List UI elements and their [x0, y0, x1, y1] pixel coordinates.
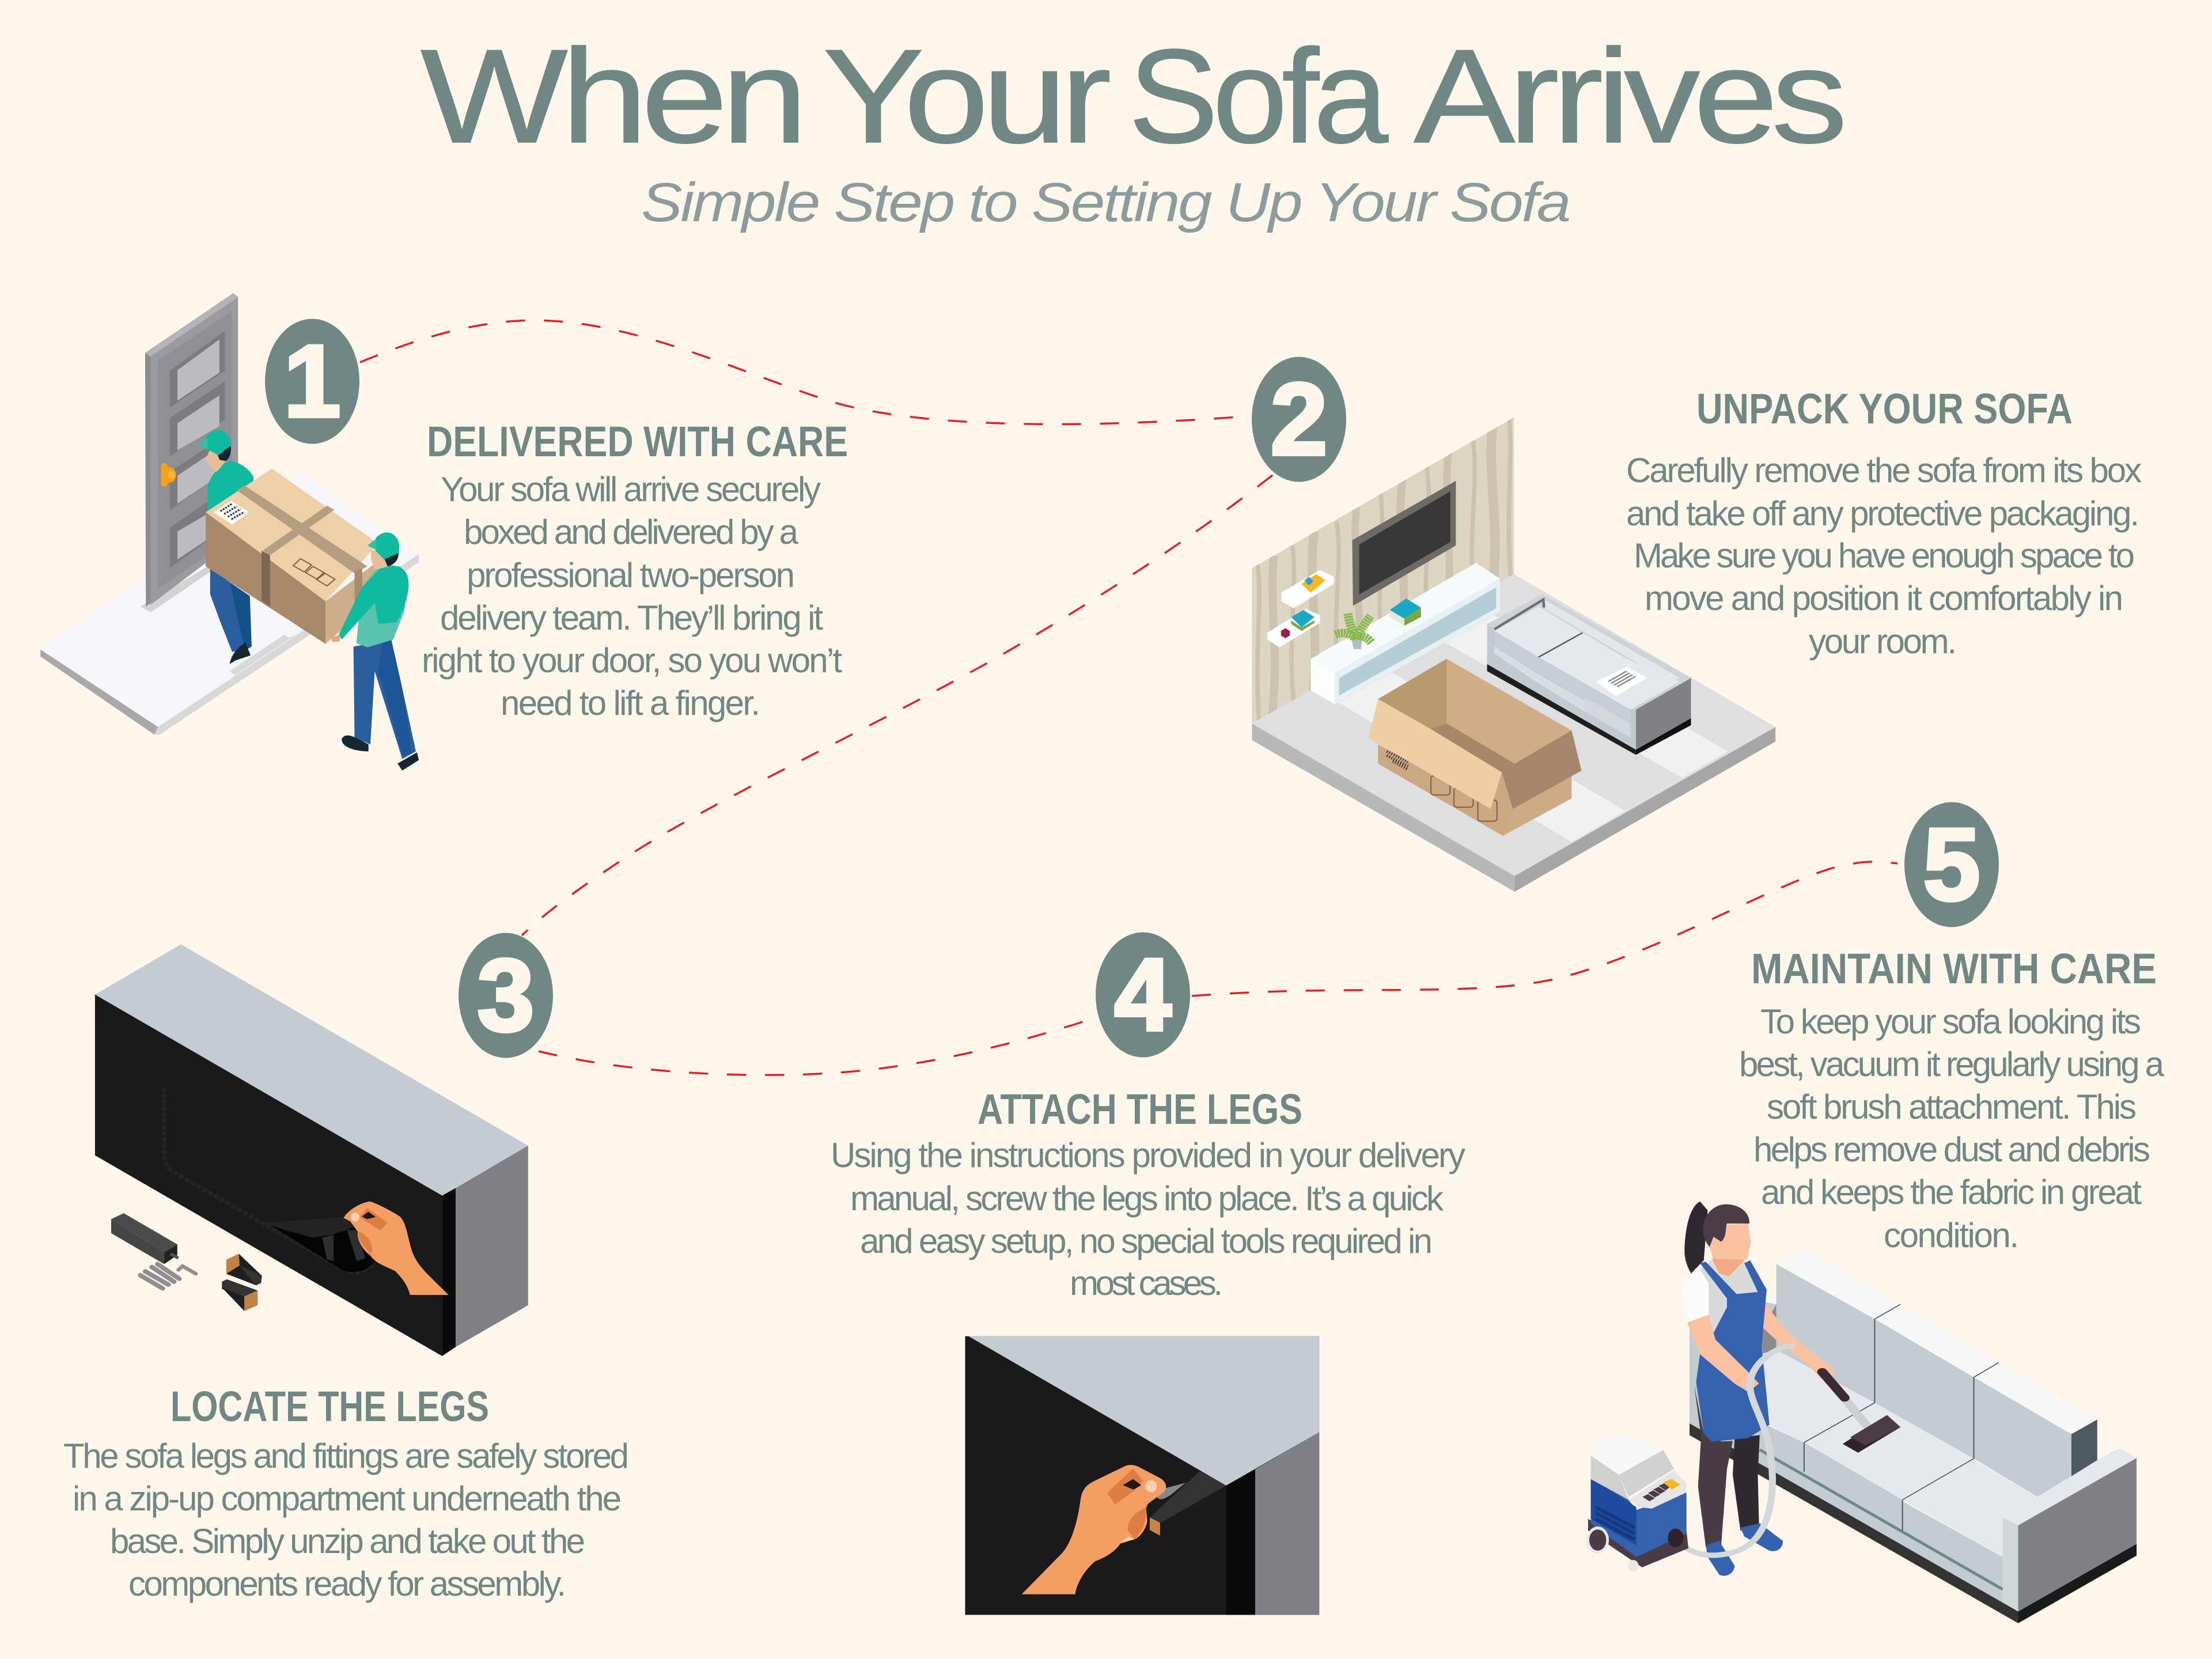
- box handling icons: [293, 559, 335, 586]
- step 1 body text: professional two-person: [467, 556, 795, 594]
- doorstep slab: [40, 472, 419, 734]
- dashed path: step 1 to step 2: [360, 320, 1253, 424]
- front delivery man: [331, 532, 419, 771]
- step 4 badge: 4: [1114, 937, 1172, 1052]
- step 2 badge: 2: [1271, 362, 1327, 476]
- sofa arm: [2003, 1448, 2137, 1525]
- step 1 badge: [265, 319, 359, 444]
- step 5 heading: MAINTAIN WITH CARE: [1751, 945, 2157, 993]
- tapered leg 1: [226, 1254, 262, 1285]
- apron: [1696, 1260, 1770, 1442]
- books on tv unit: [1390, 599, 1421, 619]
- sofa underside: [95, 995, 442, 1356]
- illustration: room with unpacked sofa: [1252, 416, 1775, 892]
- step 4 body text: manual, screw the legs into place. It’s a quick: [850, 1179, 1444, 1218]
- hand: [1022, 1465, 1166, 1594]
- dashed path: step 3 to step 4: [539, 1018, 1093, 1075]
- screws and allen key: [141, 1264, 196, 1289]
- step 5 body text: [1739, 1002, 2165, 1255]
- step 3 heading: LOCATE THE LEGS: [171, 1382, 489, 1430]
- cardboard box: [206, 469, 380, 644]
- shoes: [1706, 1541, 1734, 1576]
- legs inside compartment: [322, 1230, 365, 1261]
- step 4 heading: ATTACH THE LEGS: [978, 1085, 1302, 1133]
- side face: [1255, 1432, 1319, 1615]
- sofa top face: [95, 944, 528, 1196]
- sofa side face: [456, 1146, 528, 1347]
- shirt: [1700, 1260, 1766, 1336]
- step 4 body text: Using the instructions provided in your delivery: [831, 1136, 1465, 1175]
- step 1 body text: [422, 470, 842, 722]
- illustration: woman vacuuming sofa: [1586, 1202, 2137, 1623]
- rear delivery man: [198, 430, 253, 664]
- hand: [344, 1202, 448, 1295]
- step 3 body text: in a zip-up compartment underneath the: [73, 1479, 622, 1518]
- step 3 body text: components ready for assembly.: [128, 1565, 566, 1603]
- box markings: [1387, 751, 1497, 821]
- title: Your: [823, 22, 1109, 171]
- shipping label: [214, 501, 249, 524]
- wallpaper wall: [1252, 416, 1514, 724]
- legs: [1733, 1435, 1760, 1531]
- step 3 body text: The sofa legs and fittings are safely stored: [63, 1437, 629, 1475]
- sofa cushions: [1494, 607, 1582, 657]
- leg box with bolt: [111, 1213, 179, 1264]
- step 5 body text: soft brush attachment. This: [1767, 1088, 2137, 1126]
- step 1 body text: right to your door, so you won’t: [422, 641, 842, 680]
- step 2 body text: Make sure you have enough space to: [1634, 536, 2135, 575]
- title: When: [421, 22, 801, 171]
- open cardboard box: [1369, 659, 1581, 836]
- sofa leg: [1150, 1471, 1226, 1536]
- step 2 body text: your room.: [1809, 622, 1957, 661]
- seat cushions: [1760, 1350, 1874, 1442]
- box tape: [237, 486, 368, 573]
- tapered leg 2: [222, 1279, 257, 1311]
- sofa: [1690, 1248, 2137, 1623]
- woman: [1683, 1202, 1833, 1576]
- sofa on floor: [1487, 594, 1691, 755]
- step 2 body text: [1626, 451, 2142, 661]
- dashed path: step 4 to step 5: [1192, 862, 1897, 996]
- step 4 badge: [1096, 932, 1190, 1058]
- subtitle: Simple Step to Setting Up Your Sofa: [641, 172, 1570, 233]
- dashed path: step 2 to step 3: [522, 475, 1272, 935]
- step 4 body text: most cases.: [1070, 1264, 1223, 1302]
- step 2 heading: UNPACK YOUR SOFA: [1696, 385, 2073, 433]
- step 4 body text: [831, 1136, 1465, 1302]
- zip flap: [264, 1217, 354, 1237]
- step 5 body text: condition.: [1884, 1216, 2019, 1255]
- television: [1352, 481, 1456, 606]
- hair and face: [1684, 1202, 1707, 1274]
- step 2 body text: move and position it comfortably in: [1645, 579, 2123, 618]
- instruction paper: [1596, 667, 1647, 696]
- wall shelves with ornaments: [1267, 570, 1334, 647]
- step 5 badge: [1904, 802, 1999, 927]
- floor slab: [1252, 574, 1775, 892]
- title: [421, 22, 1842, 171]
- step 1 body text: delivery team. They’ll bring it: [440, 599, 823, 637]
- compartment opening: [269, 1225, 377, 1272]
- title: Sofa: [1128, 22, 1389, 171]
- screw: [1157, 1483, 1185, 1499]
- step 5 body text: helps remove dust and debris: [1753, 1130, 2150, 1169]
- step 1 body text: Your sofa will arrive securely: [441, 470, 821, 509]
- step 2 body text: and take off any protective packaging.: [1626, 494, 2139, 533]
- step 1 body text: boxed and delivered by a: [464, 513, 799, 551]
- sofa underside panel: [965, 1336, 1319, 1615]
- vacuum hose: [1675, 1346, 1794, 1555]
- step 4 body text: and easy setup, no special tools required in: [860, 1222, 1433, 1260]
- step 1 badge: 1: [283, 324, 341, 438]
- title: Arrives: [1414, 22, 1842, 171]
- illustration: attaching a leg: [965, 1336, 1319, 1615]
- step 3 body text: base. Simply unzip and take out the: [110, 1522, 585, 1560]
- plant: [1335, 613, 1372, 649]
- vacuum cleaner: [1586, 1434, 1688, 1572]
- step 3 badge: 3: [477, 938, 535, 1052]
- corner strip: [1226, 1469, 1255, 1615]
- illustration: delivery team carrying box to door: [40, 293, 419, 771]
- illustration: unzipping sofa base compartment: [95, 944, 528, 1356]
- control buttons: [1642, 1494, 1655, 1501]
- step 5 body text: and keeps the fabric in great: [1761, 1173, 2142, 1211]
- door: [141, 293, 238, 612]
- sofa top face: [968, 1336, 1319, 1486]
- back cushions: [1777, 1248, 1900, 1319]
- step 5 body text: best, vacuum it regularly using a: [1739, 1045, 2165, 1084]
- step 2 badge: [1252, 357, 1346, 482]
- step 1 body text: need to lift a finger.: [501, 684, 760, 722]
- wheels: [1586, 1527, 1609, 1554]
- step 2 body text: Carefully remove the sofa from its box: [1626, 451, 2142, 490]
- arms: [1760, 1304, 1833, 1379]
- door handle: [161, 463, 176, 487]
- step 1 heading: DELIVERED WITH CARE: [427, 418, 848, 465]
- zip line: [164, 1088, 375, 1272]
- vacuum wand and brush head: [1822, 1372, 1900, 1453]
- step 3 badge: [459, 933, 553, 1058]
- step 3 body text: [63, 1437, 629, 1603]
- step 5 body text: To keep your sofa looking its: [1760, 1002, 2141, 1041]
- step 5 badge: 5: [1923, 807, 1980, 922]
- tv unit: [1310, 563, 1500, 704]
- sofa corner strip: [442, 1188, 456, 1356]
